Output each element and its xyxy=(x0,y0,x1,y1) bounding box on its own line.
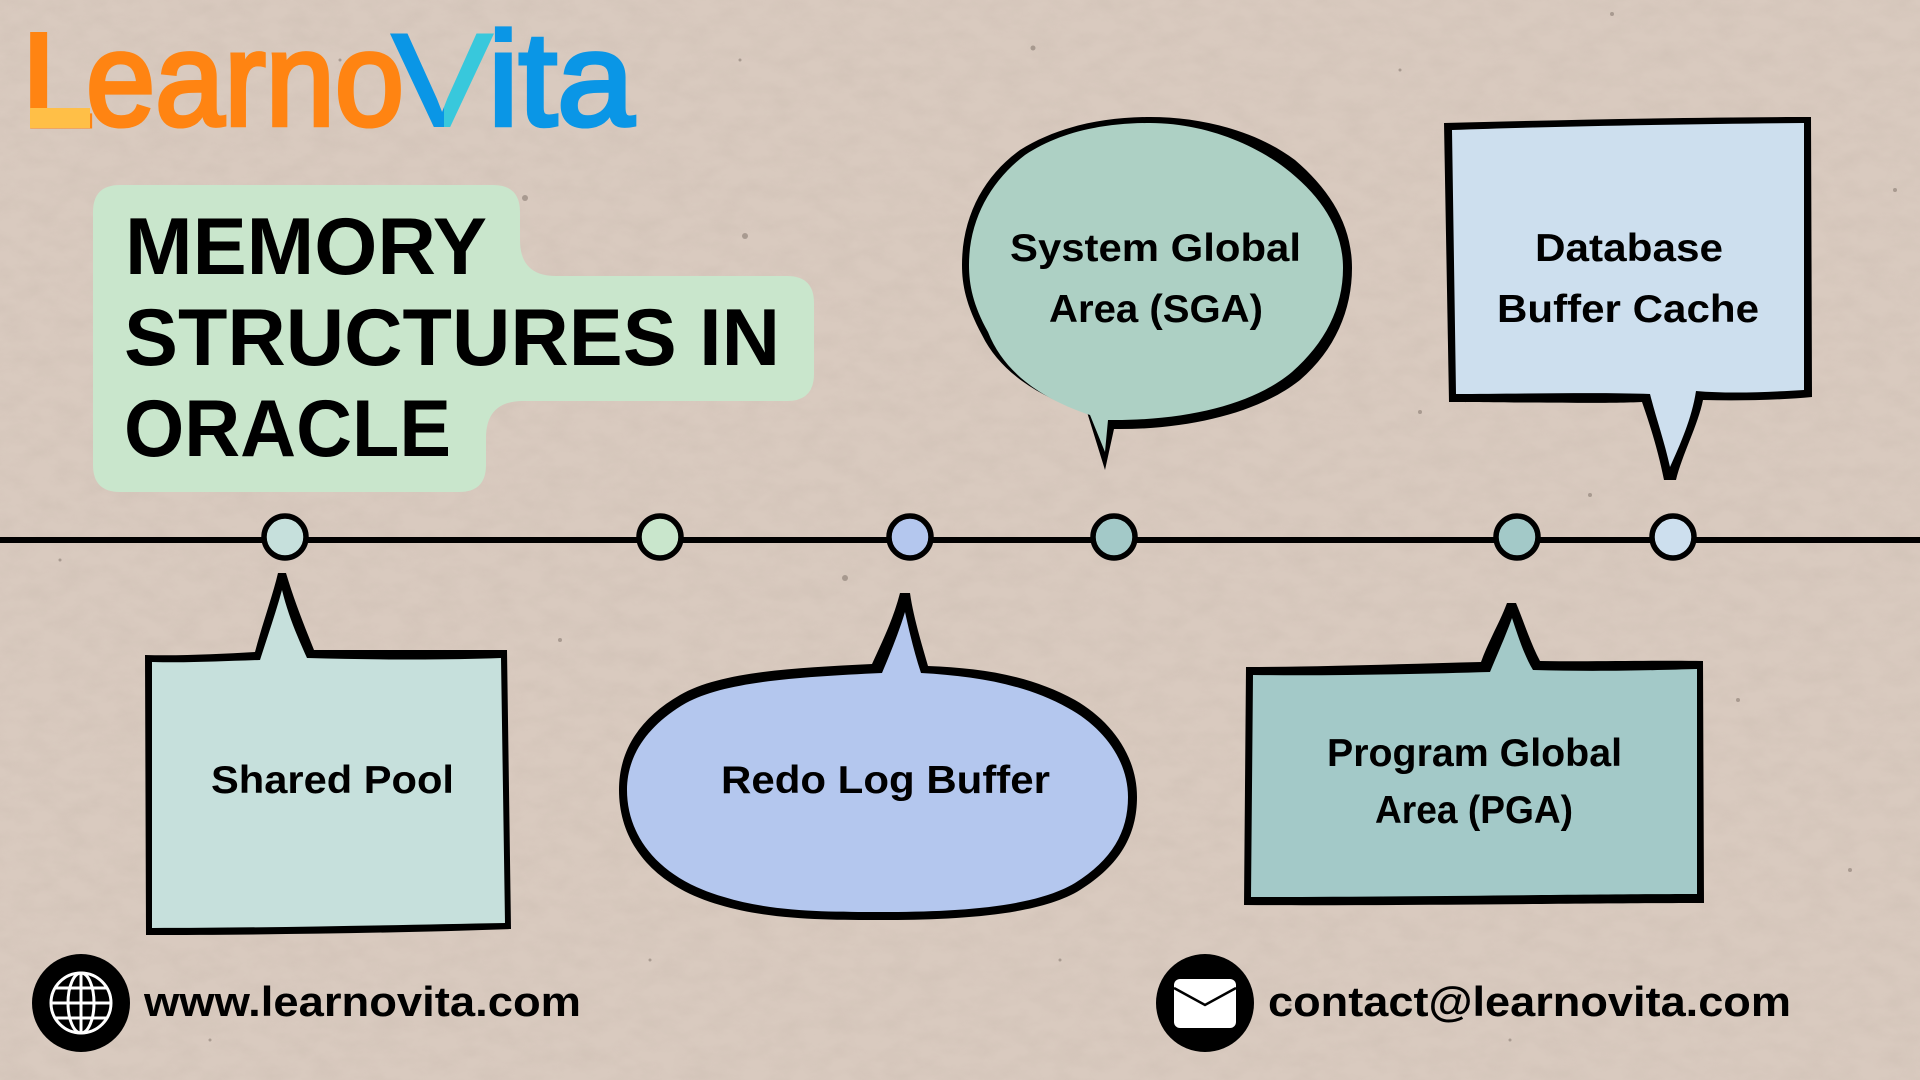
timeline node 5 xyxy=(1496,516,1538,558)
label: Buffer Cache xyxy=(1497,288,1759,331)
title text: MEMORY xyxy=(125,202,487,292)
label xyxy=(1010,227,1301,331)
logo: LearnoVita: V xyxy=(391,7,493,155)
callout: Shared Pool xyxy=(145,573,511,935)
callout: Database Buffer Cache xyxy=(1444,117,1812,480)
label xyxy=(1497,227,1759,331)
callout: Program Global Area xyxy=(1244,603,1704,905)
title panel xyxy=(93,185,814,492)
logo: LearnoVita: ita xyxy=(488,6,634,154)
email text: contact@learnovita.com xyxy=(1268,978,1791,1025)
title text: ORACLE xyxy=(124,384,451,474)
timeline xyxy=(0,516,1920,558)
callout: Redo Log Buffer xyxy=(619,593,1137,920)
callout: System Global Area xyxy=(962,117,1352,470)
timeline node 4 xyxy=(1093,516,1135,558)
logo: LearnoVita: L xyxy=(22,7,94,155)
label: Database xyxy=(1535,227,1723,270)
website text: www.learnovita.com xyxy=(143,978,581,1025)
timeline node 6 xyxy=(1652,516,1694,558)
label: Shared Pool xyxy=(211,759,454,802)
title text xyxy=(124,202,780,474)
label xyxy=(1327,732,1622,832)
timeline node 1 xyxy=(264,516,306,558)
icon: globe xyxy=(32,954,130,1052)
logo: LearnoVita: earno xyxy=(86,6,404,154)
label: Area (SGA) xyxy=(1049,288,1263,331)
timeline node 2 xyxy=(639,516,681,558)
label: System Global xyxy=(1010,227,1301,270)
logo: LearnoVita xyxy=(22,6,634,155)
label: Area (PGA) xyxy=(1375,789,1573,832)
icon: envelope xyxy=(1156,954,1254,1052)
title text: STRUCTURES IN xyxy=(124,293,780,383)
label: Redo Log Buffer xyxy=(721,759,1050,802)
timeline node 3 xyxy=(889,516,931,558)
label: Program Global xyxy=(1327,732,1622,775)
